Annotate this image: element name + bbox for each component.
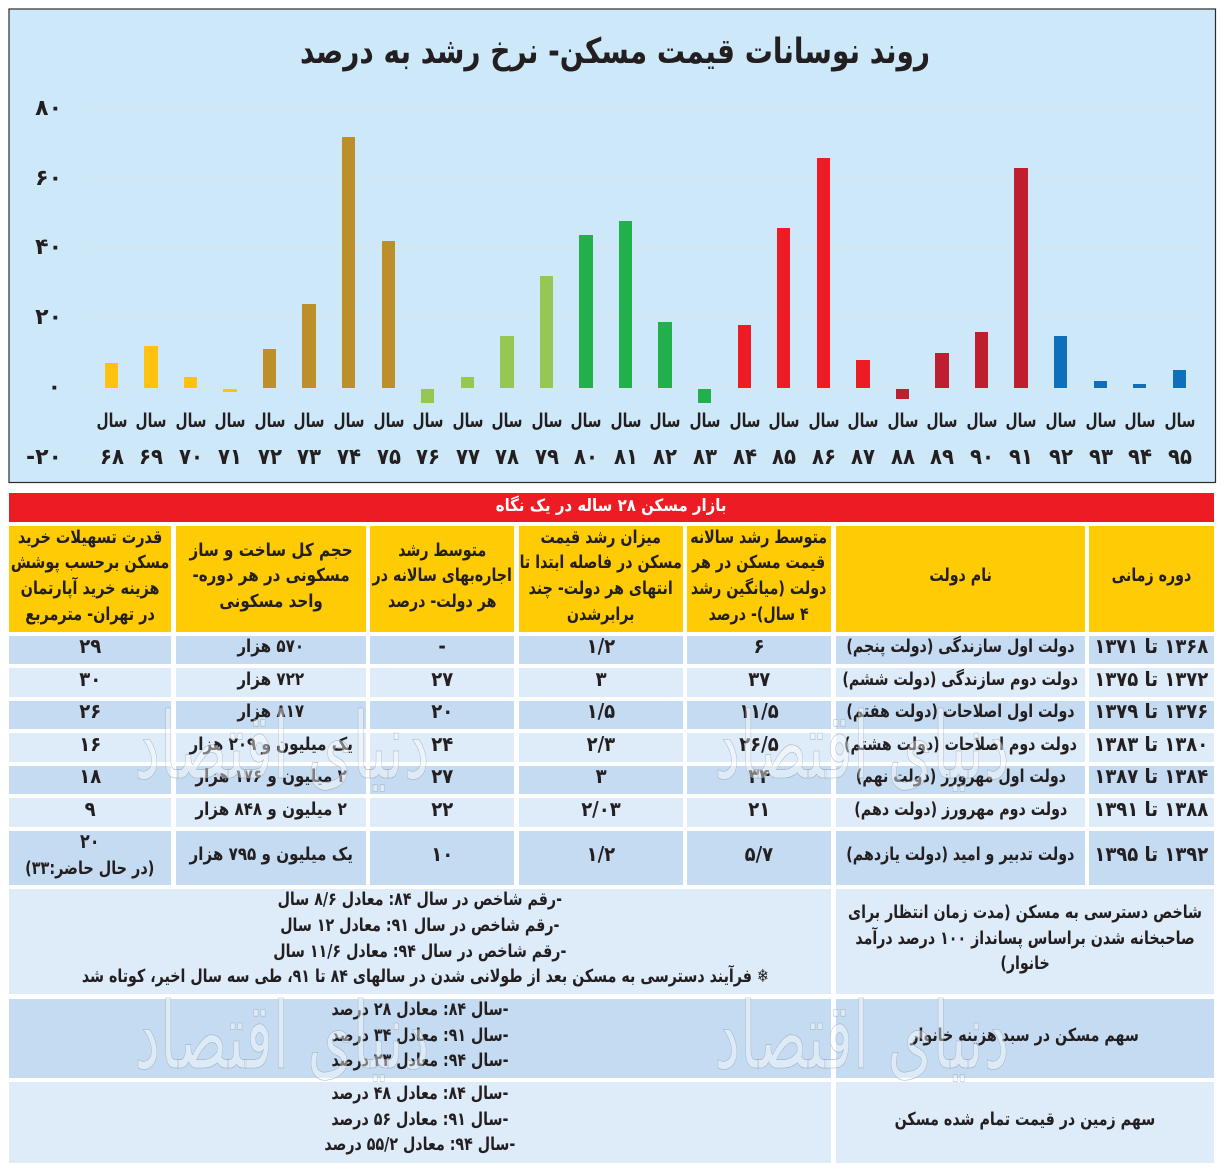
watermarks: دنیای اقتصاد xyxy=(714,693,1010,800)
year 69: سال xyxy=(136,410,166,432)
row: 1384-1387: ۳۴ xyxy=(748,764,770,788)
year 74: ۷۴ xyxy=(337,445,361,470)
year 79 xyxy=(532,276,562,470)
year 94: ۹۴ xyxy=(1128,445,1152,470)
row: 1388-1391: ۲۲ xyxy=(431,797,453,821)
year 68: سال xyxy=(96,410,128,432)
year 86: سال xyxy=(808,410,840,432)
row: 1384-1387: ۳ xyxy=(596,764,606,788)
row: 1384-1387: ۲ میلیون و ۱۷۶ هزار xyxy=(195,766,347,787)
row: housing access index: -رقم شاخص در سال ۸۴: معادل ۸/۶ سال xyxy=(278,889,562,910)
row: 1380-1383 xyxy=(9,732,1214,762)
year 93: ۹۳ xyxy=(1089,445,1114,470)
row: housing share of household basket: -سال ۹۱: معادل ۳۴ درصد xyxy=(331,1025,509,1046)
year 90: ۹۰ xyxy=(970,445,994,470)
year 72 xyxy=(254,349,286,470)
row: 1384-1387: دولت اول مهرورز (دولت نهم) xyxy=(855,766,1066,787)
year 94: سال xyxy=(1124,410,1156,432)
y axis labels xyxy=(26,96,62,470)
header: period xyxy=(1089,526,1214,632)
header: growth multiple: انتهای هر دولت- چند xyxy=(529,578,673,599)
row: 1368-1371: دولت اول سازندگی (دولت پنجم) xyxy=(846,636,1075,657)
row: 1388-1391 xyxy=(9,797,1214,827)
table title bar: بازار مسکن ۲۸ ساله در یک نگاه xyxy=(496,496,727,516)
year 71: سال xyxy=(214,410,246,432)
row: 1380-1383: یک میلیون و ۲۰۹ هزار xyxy=(189,734,353,755)
row: 1368-1371: - xyxy=(438,634,446,658)
row: housing access index: صاحبخانه شدن براساس پسانداز ۱۰۰ درصد درآمد xyxy=(855,928,1195,949)
row: 1376-1379: ۱/۵ xyxy=(587,699,615,723)
header: loan purchasing power: قدرت تسهیلات خرید xyxy=(18,527,162,548)
year 72: سال xyxy=(254,410,286,432)
year 74 xyxy=(334,137,364,470)
row: 1384-1387: ۱۸ xyxy=(79,764,101,788)
table header row xyxy=(9,526,1214,632)
title: روند نوسانات قیمت مسکن- نرخ رشد به درصد xyxy=(300,32,930,72)
row: 1372-1375: ۳۰ xyxy=(79,667,101,691)
row: 1380-1383: دولت دوم اصلاحات (دولت هشتم) xyxy=(844,734,1077,755)
year 75: ۷۵ xyxy=(377,445,401,470)
year 76: ۷۶ xyxy=(416,445,440,470)
header: growth multiple: مسکن در فاصله ابتدا تا xyxy=(520,552,682,573)
header: annual price growth: متوسط رشد سالانه xyxy=(691,527,827,548)
year 83: سال xyxy=(690,410,720,432)
year 89 xyxy=(926,353,958,470)
year 73: ۷۳ xyxy=(297,445,322,470)
row: 1368-1371: ۱/۲ xyxy=(587,634,615,658)
row: 1376-1379: ۱۳۷۶ تا ۱۳۷۹ xyxy=(1095,699,1208,723)
row: 1372-1375: ۲۷ xyxy=(431,667,453,691)
row: 1376-1379: ۲۶ xyxy=(79,699,101,723)
row: 1376-1379: ۱۱/۵ xyxy=(739,699,779,723)
row: 1372-1375: ۱۳۷۲ تا ۱۳۷۵ xyxy=(1095,667,1208,691)
year 83 xyxy=(690,389,720,470)
year 72: ۷۲ xyxy=(258,445,283,470)
year 85: سال xyxy=(768,410,800,432)
year 68: ۶۸ xyxy=(100,445,125,470)
row: 1392-1395: ۲۰ xyxy=(80,829,100,853)
year 69 xyxy=(136,346,166,470)
row: 1376-1379: ۸۱۷ هزار xyxy=(238,701,304,722)
row: 1380-1383: ۲۶/۵ xyxy=(739,732,779,756)
row: 1384-1387: ۲۷ xyxy=(431,764,453,788)
row: 1388-1391: دولت دوم مهرورز (دولت دهم) xyxy=(854,799,1067,820)
header: annual price growth: ۴ سال)- درصد xyxy=(709,604,809,625)
year 83: ۸۳ xyxy=(693,445,718,470)
watermarks: دنیای اقتصاد xyxy=(134,983,430,1090)
row: 1368-1371: ۱۳۶۸ تا ۱۳۷۱ xyxy=(1095,634,1208,658)
row: housing access index: -رقم شاخص در سال ۹۴: معادل ۱۱/۶ سال xyxy=(273,940,567,962)
year 75: سال xyxy=(374,410,404,432)
year 91: سال xyxy=(1006,410,1036,432)
header: rent growth xyxy=(370,526,514,632)
row: 1392-1395 xyxy=(9,829,1214,885)
year 92 xyxy=(1046,336,1076,470)
header: growth multiple xyxy=(519,526,683,632)
year 76: سال xyxy=(412,410,444,432)
row: 1392-1395: ۱۳۹۲ تا ۱۳۹۵ xyxy=(1095,842,1208,866)
y axis labels: ۸۰ xyxy=(35,96,62,121)
row: 1392-1395: ۵/۷ xyxy=(745,842,773,866)
bars and year labels xyxy=(96,137,1196,470)
header: loan purchasing power: هزینه خرید آپارتمان xyxy=(21,578,159,599)
year 85: ۸۵ xyxy=(772,445,796,470)
year 79: ۷۹ xyxy=(535,445,559,470)
header: growth multiple: میزان رشد قیمت xyxy=(541,527,661,548)
year 78 xyxy=(492,336,522,470)
year 77 xyxy=(452,377,484,470)
year 90 xyxy=(966,332,998,470)
row: 1384-1387: ۱۳۸۴ تا ۱۳۸۷ xyxy=(1095,764,1208,788)
row: land share of housing price: -سال ۹۴: معادل ۵۵/۲ درصد xyxy=(325,1134,515,1155)
row: 1376-1379 xyxy=(9,699,1214,729)
year 84: سال xyxy=(730,410,760,432)
row: 1368-1371 xyxy=(9,634,1214,664)
year 91: ۹۱ xyxy=(1009,445,1033,470)
row: 1372-1375: ۳۷ xyxy=(748,667,770,691)
watermarks: دنیای اقتصاد xyxy=(134,693,430,800)
table title bar xyxy=(9,493,1214,522)
row: 1380-1383: ۲/۳ xyxy=(587,732,615,756)
row: 1368-1371: ۲۹ xyxy=(79,634,101,658)
header: loan purchasing power: در تهران- مترمربع xyxy=(25,604,155,625)
header: annual price growth: دولت (میانگین رشد xyxy=(691,578,827,599)
row: 1376-1379: ۲۰ xyxy=(431,699,453,723)
year 81: ۸۱ xyxy=(614,445,638,470)
row: 1372-1375: ۳ xyxy=(596,667,606,691)
row: 1368-1371: ۵۷۰ هزار xyxy=(238,636,304,657)
header: loan purchasing power xyxy=(9,526,171,632)
year 77: سال xyxy=(452,410,484,432)
year 87: ۸۷ xyxy=(851,445,876,470)
header: annual price growth: قیمت مسکن در هر xyxy=(692,552,826,573)
year 86 xyxy=(808,158,840,470)
year 94 xyxy=(1124,384,1156,470)
year 92: سال xyxy=(1046,410,1076,432)
y axis labels: ۰ xyxy=(48,375,61,400)
row: 1388-1391: ۲ میلیون و ۸۴۸ هزار xyxy=(195,799,347,820)
header: loan purchasing power: مسکن برحسب پوشش xyxy=(11,552,169,573)
header: period: دوره زمانی xyxy=(1112,565,1191,586)
row: land share of housing price: -سال ۹۱: معادل ۵۶ درصد xyxy=(331,1109,509,1130)
header: growth multiple: برابرشدن xyxy=(567,604,635,625)
year 77: ۷۷ xyxy=(456,445,481,470)
year 68 xyxy=(96,363,128,470)
row: 1368-1371: ۶ xyxy=(754,634,764,658)
year 86: ۸۶ xyxy=(812,445,836,470)
year 89: ۸۹ xyxy=(930,445,954,470)
row: 1392-1395: دولت تدبیر و امید (دولت یازدهم) xyxy=(846,844,1075,865)
row: housing share of household basket: -سال ۹۴: معادل ۲۳ درصد xyxy=(331,1050,509,1071)
year 85 xyxy=(768,228,800,470)
row: 1380-1383: ۱۳۸۰ تا ۱۳۸۳ xyxy=(1095,732,1208,756)
year 81: سال xyxy=(610,410,642,432)
header: government name: نام دولت xyxy=(929,565,992,586)
row: land share of housing price: سهم زمین در قیمت تمام شده مسکن xyxy=(895,1109,1155,1130)
row: 1392-1395: ۱/۲ xyxy=(587,842,615,866)
year 70: سال xyxy=(176,410,206,432)
year 95: ۹۵ xyxy=(1168,445,1192,470)
y axis labels: ۶۰ xyxy=(35,166,62,191)
year 74: سال xyxy=(334,410,364,432)
row: 1388-1391: ۲/۰۳ xyxy=(581,797,621,821)
row: 1372-1375 xyxy=(9,667,1214,697)
year 79: سال xyxy=(532,410,562,432)
watermarks: دنیای اقتصاد xyxy=(714,983,1010,1090)
year 78: ۷۸ xyxy=(495,445,520,470)
header: construction volume: مسکونی در هر دوره- xyxy=(192,565,350,586)
header: rent growth: اجاره‌بهای سالانه در xyxy=(372,565,512,586)
header: annual price growth xyxy=(687,526,831,632)
year 80 xyxy=(570,235,602,470)
year 80: سال xyxy=(570,410,602,432)
year 84 xyxy=(730,325,760,470)
header: government name xyxy=(836,526,1085,632)
year 73 xyxy=(294,304,324,470)
row: housing access index: -رقم شاخص در سال ۹۱: معادل ۱۲ سال xyxy=(280,915,560,936)
row: 1380-1383: ۲۴ xyxy=(431,732,453,756)
header: rent growth: متوسط رشد xyxy=(398,540,486,561)
row: 1372-1375: ۷۲۲ هزار xyxy=(238,669,304,690)
row: housing access index: شاخص دسترسی به مسکن (مدت زمان انتظار برای xyxy=(848,902,1202,923)
row: land share of housing price xyxy=(9,1082,1214,1163)
year 84: ۸۴ xyxy=(733,445,757,470)
year 82: سال xyxy=(650,410,680,432)
year 76 xyxy=(412,389,444,470)
year 91 xyxy=(1006,168,1036,470)
header: rent growth: هر دولت- درصد xyxy=(388,591,496,612)
row: 1384-1387 xyxy=(9,764,1214,794)
row: 1392-1395: یک میلیون و ۷۹۵ هزار xyxy=(189,844,353,865)
row: 1388-1391: ۲۱ xyxy=(748,797,770,821)
year 70: ۷۰ xyxy=(179,445,203,470)
year 89: سال xyxy=(926,410,958,432)
row: 1380-1383: ۱۶ xyxy=(79,732,101,756)
year 90: سال xyxy=(966,410,998,432)
row: 1372-1375: دولت دوم سازندگی (دولت ششم) xyxy=(843,669,1078,690)
y axis labels: -۲۰ xyxy=(26,445,62,470)
header: construction volume: حجم کل ساخت و ساز xyxy=(189,540,353,561)
year 93 xyxy=(1086,381,1116,470)
row: housing access index xyxy=(9,889,1214,994)
year 92: ۹۲ xyxy=(1049,445,1074,470)
year 88: سال xyxy=(888,410,918,432)
year 81 xyxy=(610,221,642,470)
row: 1392-1395: (در حال حاضر:۳۳) xyxy=(25,858,155,878)
row: 1376-1379: دولت اول اصلاحات (دولت هفتم) xyxy=(846,701,1075,722)
y axis labels: ۲۰ xyxy=(35,305,62,330)
year 73: سال xyxy=(294,410,324,432)
row: housing access index: خانوار) xyxy=(1000,953,1050,974)
year 95 xyxy=(1164,370,1196,470)
header: construction volume xyxy=(176,526,366,632)
year 71 xyxy=(214,389,246,470)
row: housing share of household basket: سهم مسکن در سبد هزینه خانوار xyxy=(911,1025,1139,1046)
year 93: سال xyxy=(1086,410,1116,432)
panel: growth rate bar chart xyxy=(8,8,1216,484)
year 69: ۶۹ xyxy=(139,445,163,470)
year 95: سال xyxy=(1164,410,1196,432)
year 82: ۸۲ xyxy=(653,445,678,470)
row: housing share of household basket: -سال ۸۴: معادل ۲۸ درصد xyxy=(331,999,509,1020)
year 78: سال xyxy=(492,410,522,432)
year 70 xyxy=(176,377,206,470)
year 82 xyxy=(650,322,680,470)
row: 1388-1391: ۱۳۸۸ تا ۱۳۹۱ xyxy=(1095,797,1208,821)
year 87: سال xyxy=(848,410,878,432)
row: 1388-1391: ۹ xyxy=(85,797,95,821)
row: 1392-1395: ۱۰ xyxy=(431,842,453,866)
row: housing access index: ❄ فرآیند دسترسی به مسکن بعد از طولانی شدن در سالهای ۸۴ تا ۹۱، طی سه سال اخیر، کوتاه شد xyxy=(82,966,769,987)
year 88: ۸۸ xyxy=(891,445,916,470)
year 87 xyxy=(848,360,878,470)
row: housing share of household basket xyxy=(9,999,1214,1078)
year 71: ۷۱ xyxy=(218,445,242,470)
header: construction volume: واحد مسکونی xyxy=(219,591,323,612)
y axis labels: ۴۰ xyxy=(35,235,62,260)
year 80: ۸۰ xyxy=(574,445,598,470)
year 88 xyxy=(888,389,918,470)
row: land share of housing price: -سال ۸۴: معادل ۴۸ درصد xyxy=(331,1083,509,1104)
year 75 xyxy=(374,241,404,470)
